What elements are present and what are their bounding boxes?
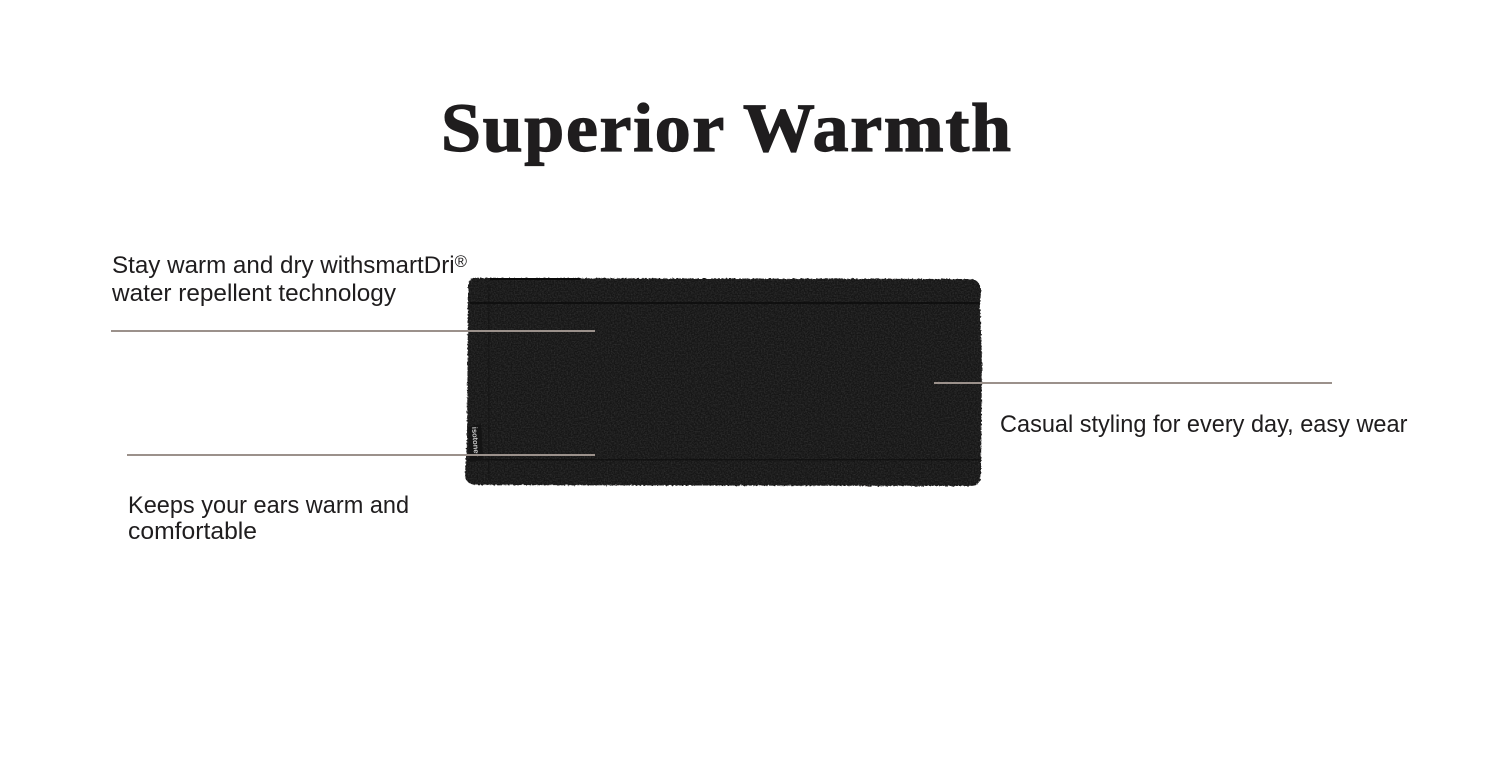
- callout: smartDri text: Stay warm and dry withsmartDri®: [112, 252, 467, 279]
- title: Superior Warmth: [441, 90, 1013, 166]
- callout: smartDri text: [112, 252, 467, 307]
- callout text: ears: [128, 492, 409, 545]
- icon: brand tag: isotoner: [470, 427, 481, 457]
- callout text: styling: Casual styling for every day, easy wear: [1000, 411, 1407, 438]
- callout line: smartDri: [111, 330, 595, 332]
- callout text: ears: Keeps your ears warm and: [128, 492, 409, 519]
- callout line: styling: [934, 382, 1332, 384]
- callout: smartDri text: water repellent technology: [112, 280, 396, 307]
- callout line: ears: [127, 454, 595, 456]
- icon: brand tag: [468, 424, 483, 462]
- product photo: black fleece headband: [464, 277, 982, 487]
- callout text: ears: comfortable: [128, 518, 257, 545]
